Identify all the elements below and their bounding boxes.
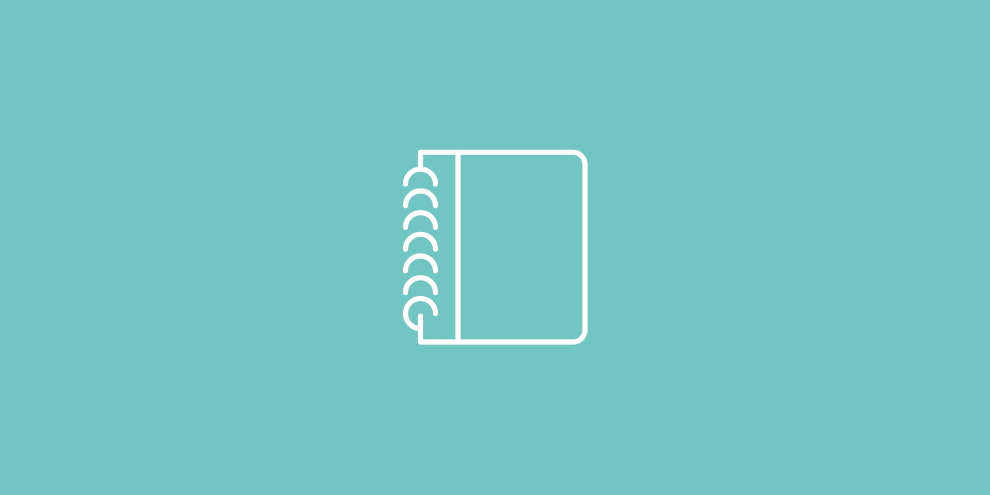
notebook cover outline xyxy=(420,152,585,342)
notebook spine divider xyxy=(455,152,461,342)
spiral binding rings xyxy=(406,169,436,328)
icon: spiral notebook xyxy=(406,152,585,342)
